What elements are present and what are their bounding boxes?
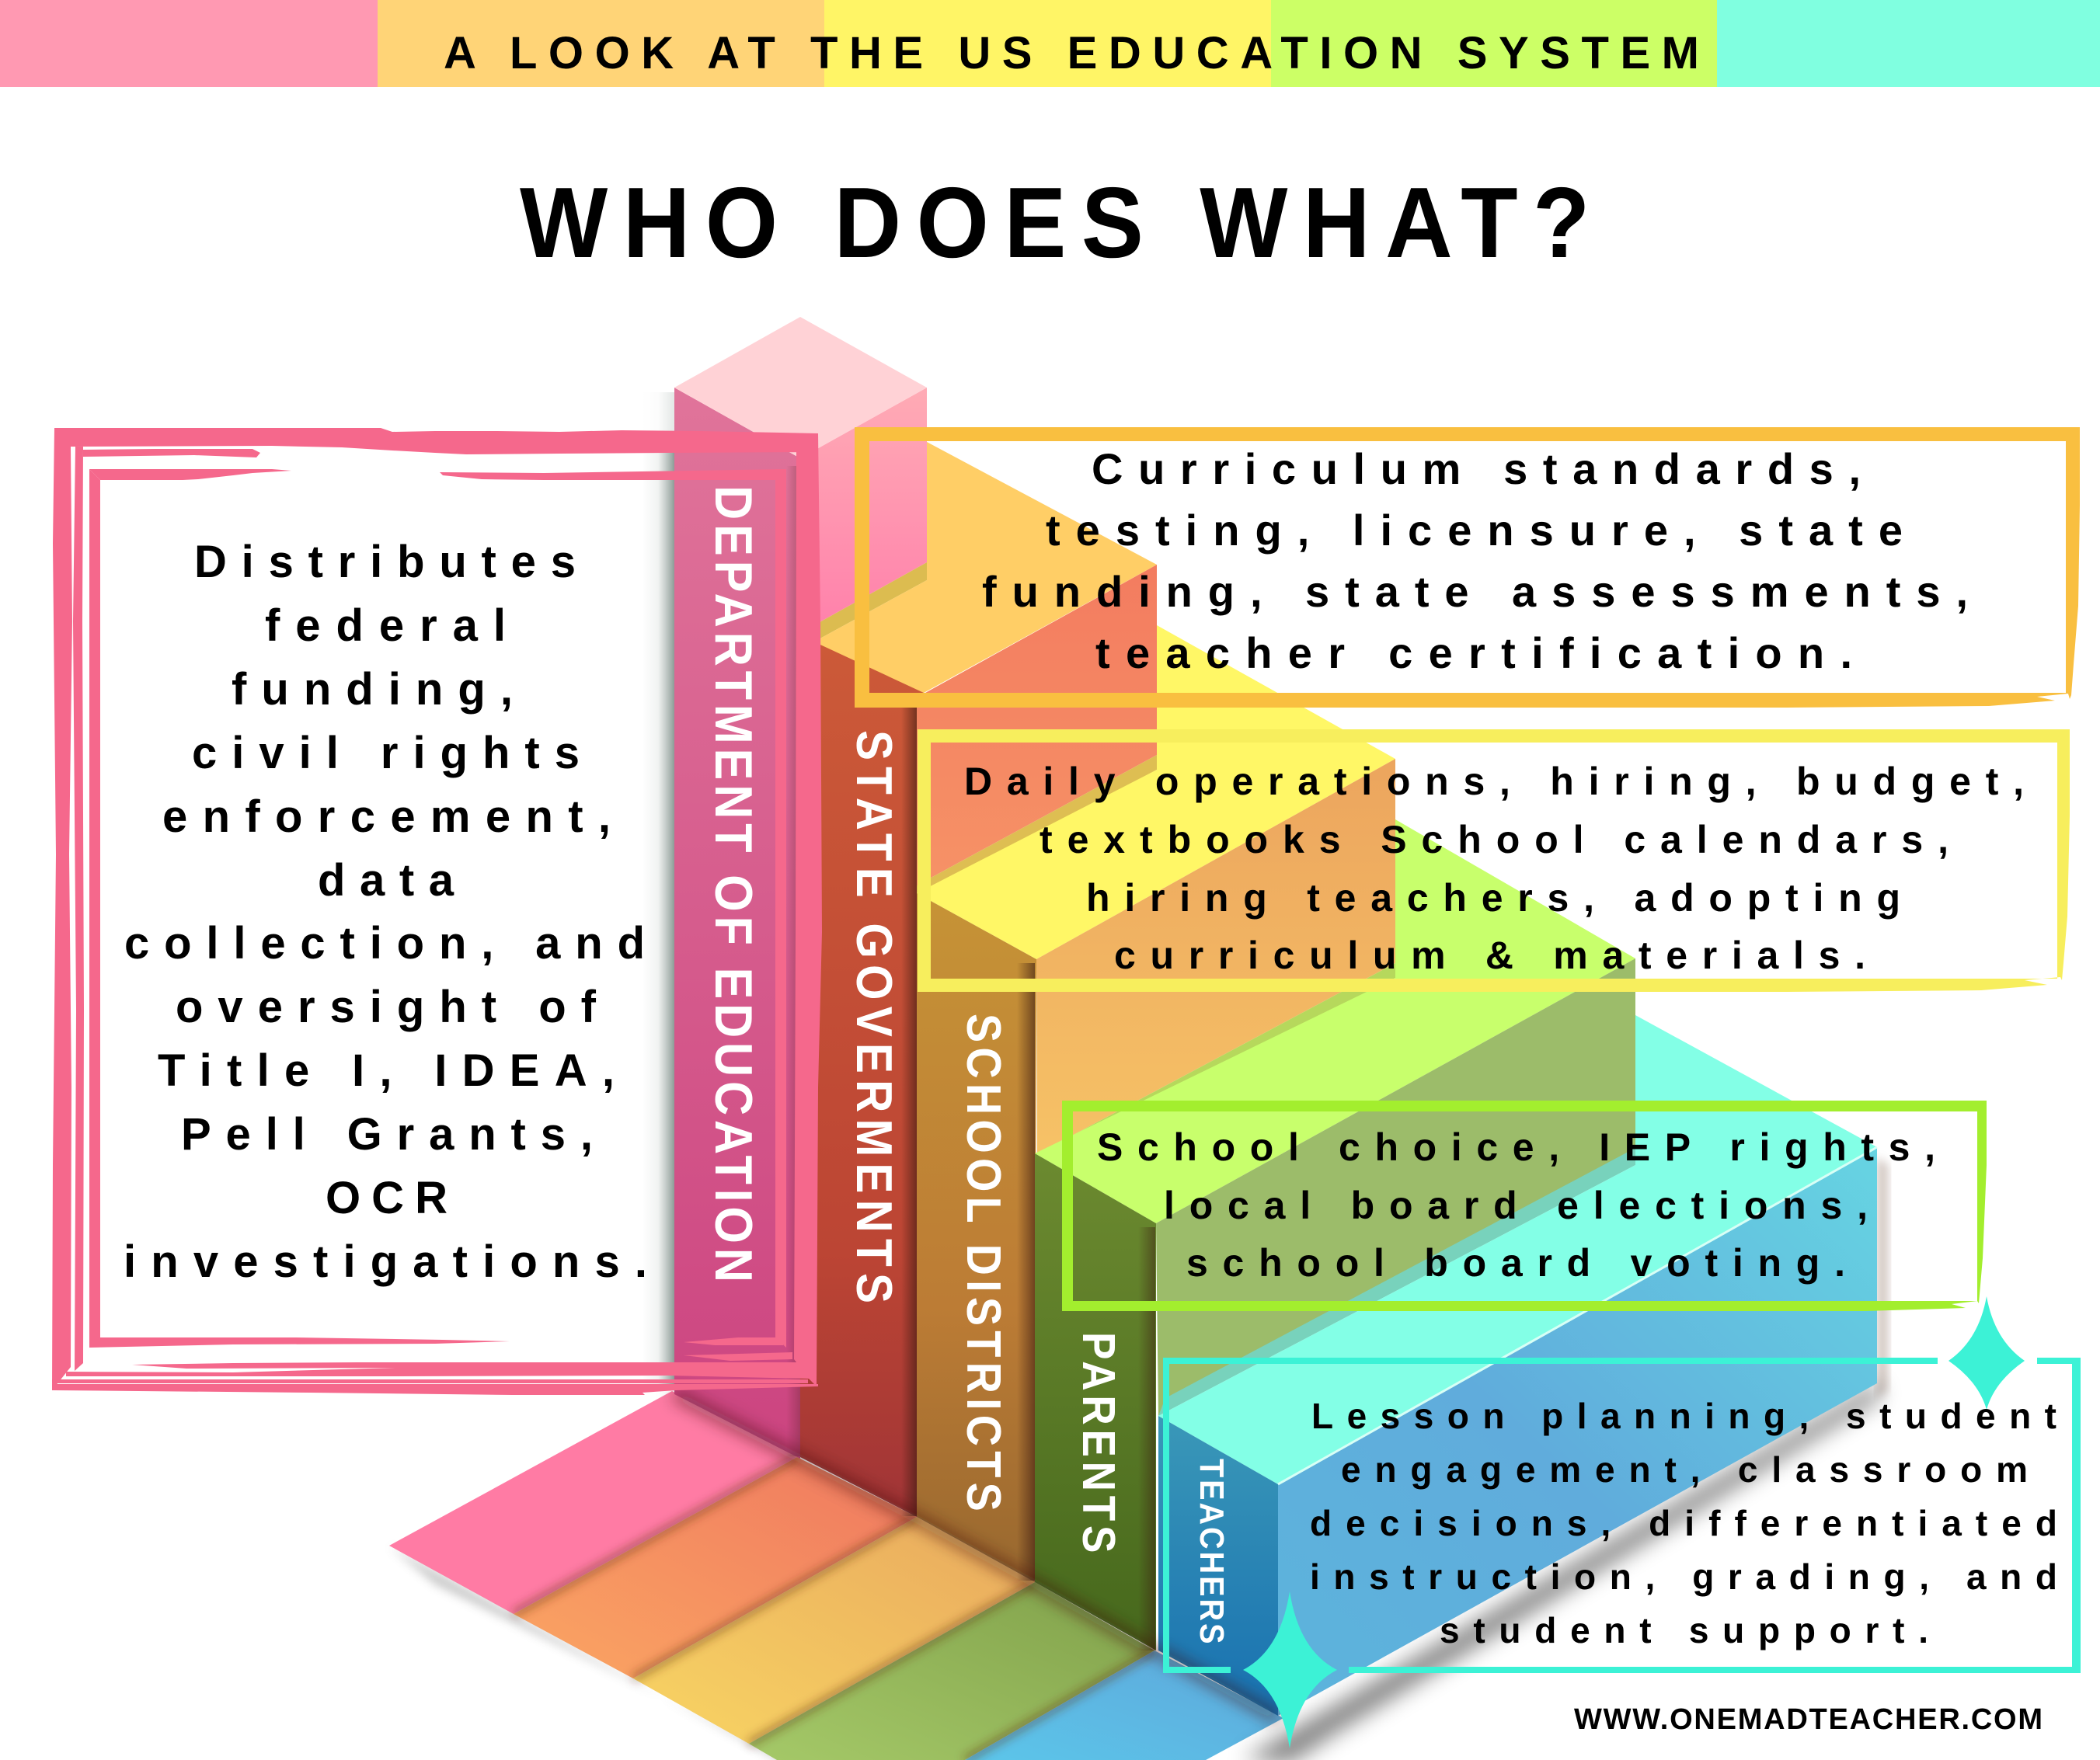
label: state governments: STATE GOVERMENTS [845, 730, 902, 1303]
bar: state governments [800, 442, 1157, 1517]
shadow beside federal column [642, 392, 674, 1390]
text: state duties: Curriculum standards, [1092, 444, 1861, 493]
panel: school district responsibilities [918, 729, 2070, 1511]
label: department of education: DEPARTMENT OF EDUCATION [704, 485, 764, 1282]
text: parent duties: School choice, IEP rights, [1097, 1125, 1935, 1169]
panel: state responsibilities [845, 427, 2080, 1303]
text: state duties [982, 444, 1968, 677]
text: teacher duties: engagement, classroom [1341, 1449, 2028, 1490]
text: parent duties: school board voting. [1186, 1241, 1845, 1285]
text: district duties: hiring teachers, adopting [1086, 876, 1900, 920]
brush frame: pink [52, 428, 822, 1395]
floor bands [389, 1391, 1283, 1760]
wall and floor seams [674, 1394, 1278, 1718]
footer website: WWW.ONEMADTEACHER.COM [1574, 1703, 2043, 1736]
panel: federal responsibilities [52, 428, 822, 1395]
text: state duties: funding, state assessments, [982, 567, 1968, 616]
text: district duties: Daily operations, hiring, budget, [964, 760, 2024, 803]
text: federal duties: federal [265, 600, 506, 651]
label: school districts: SCHOOL DISTRICTS [956, 1014, 1010, 1511]
text: federal duties: OCR [326, 1173, 448, 1223]
text: federal duties: Pell Grants, [181, 1109, 593, 1160]
text: federal duties [124, 537, 647, 1287]
panel: teacher responsibilities [1163, 1296, 2081, 1748]
text: state duties: testing, licensure, state [1046, 506, 1903, 555]
text: federal duties: civil rights [192, 728, 580, 778]
text: federal duties: oversight of [176, 982, 597, 1032]
panel: parent responsibilities [1062, 1101, 1987, 1553]
bar: parents [1035, 819, 1635, 1650]
text: federal duties: collection, and [124, 918, 645, 969]
text: state duties: teacher certification. [1095, 628, 1852, 677]
brush frame: lime [1062, 1101, 1987, 1311]
brush frame: orange [855, 427, 2080, 708]
frame: aqua [1163, 1358, 2081, 1673]
bar: department of education [674, 317, 927, 1459]
label: teachers: TEACHERS [1193, 1459, 1231, 1644]
text: federal duties: funding, [232, 664, 513, 715]
main heading: WHO DOES WHAT? [520, 167, 1590, 279]
text: federal duties: Distributes [194, 537, 576, 587]
icon: sparkle top [1949, 1296, 2025, 1410]
brush frame: yellow [918, 729, 2070, 992]
header colour band [0, 0, 2100, 87]
isometric staircase chart [389, 317, 1888, 1760]
text: federal duties: enforcement, [162, 791, 611, 842]
text: parent duties: local board elections, [1164, 1184, 1868, 1227]
text: federal duties: Title I, IDEA, [158, 1045, 615, 1096]
text: federal duties: investigations. [124, 1237, 647, 1287]
text: district duties: textbooks School calendars, [1040, 818, 1949, 861]
bar: school districts [917, 625, 1395, 1582]
header title: A LOOK AT THE US EDUCATION SYSTEM [444, 28, 1699, 78]
bar: teachers [1158, 1015, 1888, 1760]
text: district duties [964, 760, 2024, 977]
text: federal duties: data [318, 855, 454, 906]
icon: sparkle bottom [1243, 1591, 1337, 1748]
text: teacher duties: decisions, differentiated [1310, 1503, 2057, 1543]
text: teacher duties [1310, 1396, 2057, 1650]
text: teacher duties: instruction, grading, and [1310, 1557, 2057, 1597]
text: parent duties [1097, 1125, 1935, 1285]
text: teacher duties: student support. [1440, 1610, 1928, 1650]
label: parents: PARENTS [1073, 1332, 1125, 1553]
text: teacher duties: Lesson planning, student [1311, 1396, 2056, 1436]
text: district duties: curriculum & materials. [1114, 934, 1865, 977]
